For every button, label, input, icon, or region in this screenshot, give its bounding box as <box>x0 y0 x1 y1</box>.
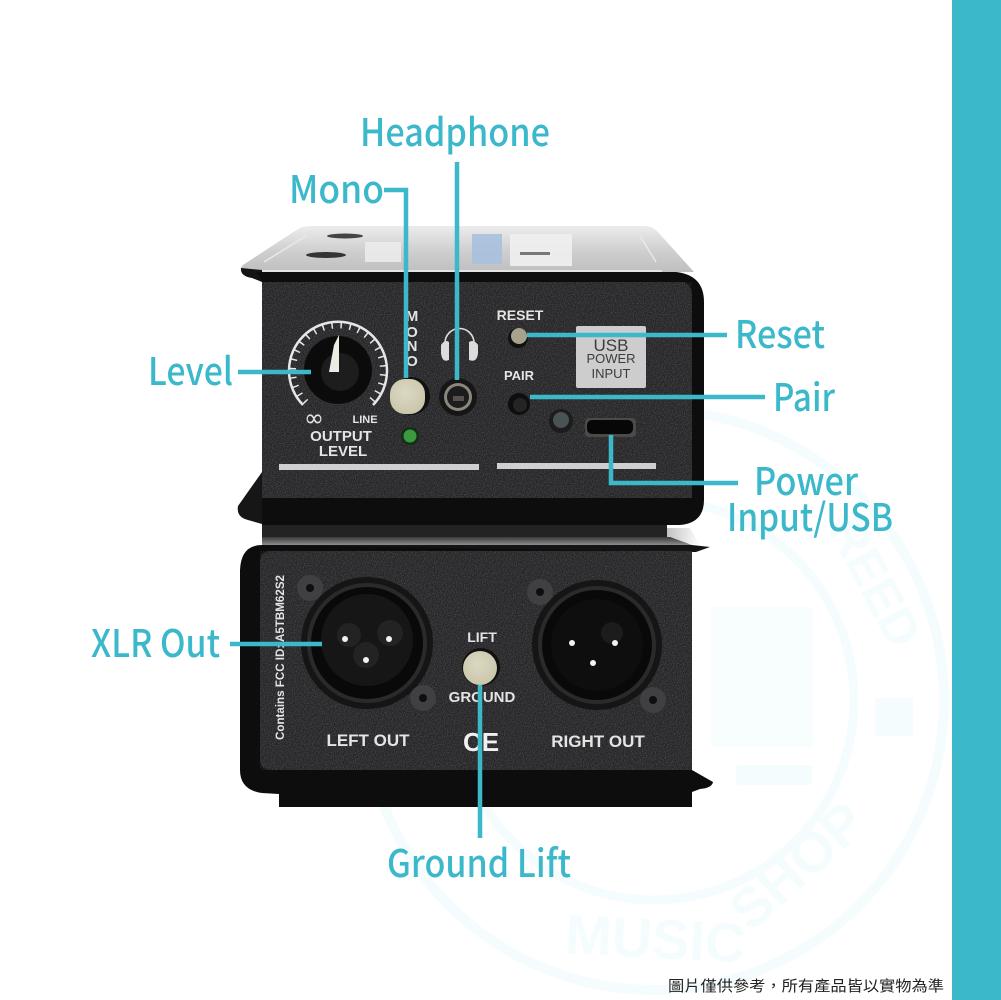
panel markings: LEVEL <box>319 443 367 460</box>
panel markings: ∞ <box>304 404 324 432</box>
callout: Power Input/USB <box>611 435 893 542</box>
front panel of upper unit <box>256 272 704 525</box>
USB power input label <box>576 326 646 388</box>
USB-C port <box>585 418 636 437</box>
USB power input label: USB <box>594 336 628 355</box>
rear panel markings: RIGHT OUT <box>551 732 645 751</box>
callout: Power Input/USB: Power <box>754 451 858 506</box>
right XLR connector <box>532 580 662 710</box>
pair button <box>508 393 530 415</box>
reset button <box>508 328 528 348</box>
headphone icon <box>441 328 478 361</box>
status LED <box>549 409 573 433</box>
mono button <box>390 377 430 415</box>
panel markings: PAIR <box>504 368 535 383</box>
panel markings: LINE <box>352 414 378 426</box>
rear panel markings: LIFT <box>467 629 497 645</box>
gap shadow between units <box>262 525 700 545</box>
callout: Mono: Mono <box>289 159 384 214</box>
connector screws <box>297 575 666 713</box>
rear panel markings: GROUND <box>449 689 515 706</box>
footer note: 圖片僅供參考，所有產品皆以實物為準 <box>668 977 944 995</box>
rear panel markings <box>326 629 645 757</box>
watermark: shop seal: REED <box>818 508 932 656</box>
callout: Reset: Reset <box>735 304 825 359</box>
top face of upper unit <box>241 226 694 276</box>
green LED <box>401 427 419 445</box>
callout: Power Input/USB: Input/USB <box>727 487 893 542</box>
panel markings: O <box>406 324 418 341</box>
panel markings <box>304 307 544 460</box>
callout: Ground Lift: Ground Lift <box>387 833 571 888</box>
watermark: shop seal <box>364 410 944 990</box>
ground lift button <box>462 648 500 686</box>
callout: Mono <box>289 159 406 378</box>
panel markings: M <box>406 308 418 325</box>
rear panel markings: LEFT OUT <box>326 731 410 750</box>
panel markings: N <box>407 338 417 355</box>
device: lower unit <box>240 537 713 807</box>
rear panel markings: CE <box>463 727 499 757</box>
headphone jack <box>439 378 477 416</box>
panel markings: RESET <box>497 307 544 323</box>
FCC text: Contains FCC ID: A5TBM62S2 <box>275 575 287 740</box>
base plate of lower unit <box>240 545 713 807</box>
callout: Headphone: Headphone <box>360 102 550 157</box>
rear lip of lower unit <box>262 537 692 545</box>
panel markings: OUTPUT <box>310 428 372 445</box>
USB power input label: POWER <box>586 351 636 366</box>
right color band <box>952 0 1001 1000</box>
watermark: shop seal: MUSIC <box>564 902 747 975</box>
watermark: shop seal: SHOP <box>717 789 877 942</box>
label stripes <box>279 464 479 470</box>
lower flange of upper unit <box>238 472 640 526</box>
front panel of lower unit <box>260 551 692 770</box>
callout: XLR Out: XLR Out <box>91 613 220 668</box>
device: upper unit <box>238 226 704 526</box>
callout: Level: Level <box>148 341 233 396</box>
output level knob <box>289 322 387 405</box>
left XLR connector <box>301 577 433 709</box>
callout: Pair: Pair <box>773 367 835 422</box>
panel markings: O <box>406 353 418 370</box>
USB power input label: INPUT <box>592 366 631 381</box>
